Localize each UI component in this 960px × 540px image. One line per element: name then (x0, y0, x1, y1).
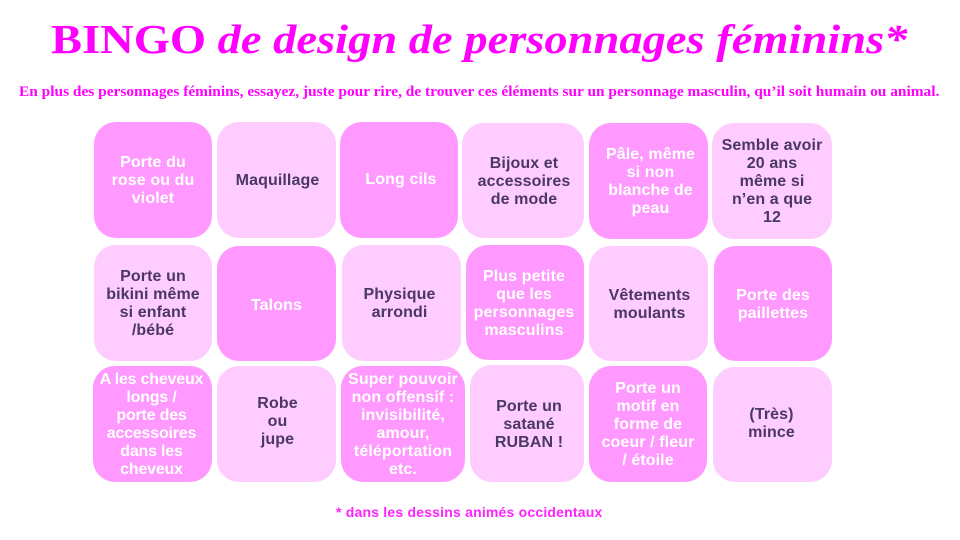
card: cheveux longs: porte des (116, 407, 187, 424)
card: plus petite: personnages (474, 304, 574, 320)
card: semble avoir 20 ans: même si (740, 173, 804, 190)
card: ruban: satané (503, 416, 555, 432)
card: talons: Talons (251, 296, 302, 314)
card: vetements moulants: moulants (614, 304, 685, 322)
card: pale: peau (632, 200, 669, 217)
card: ruban (470, 365, 584, 482)
card: bijoux: accessoires (478, 172, 570, 190)
card: motif: motif en (616, 398, 680, 415)
card: semble avoir 20 ans: Semble avoir (722, 137, 822, 154)
card: bijoux (462, 123, 584, 238)
card: bikini (94, 245, 212, 361)
card: motif: Porte un (615, 380, 681, 397)
card: rose ou violet: rose ou du (112, 172, 194, 189)
card: plus petite: Plus petite (483, 268, 565, 284)
card: bijoux: de mode (491, 190, 557, 208)
card: robe ou jupe: ou (268, 413, 287, 430)
card: bikini: si enfant (120, 304, 186, 321)
card: plus petite: masculins (484, 322, 564, 338)
card: plus petite (466, 245, 584, 360)
card: paillettes: paillettes (738, 304, 808, 322)
card: rose ou violet: Porte du (120, 154, 186, 171)
card: physique arrondi (342, 245, 461, 361)
card: long cils (340, 122, 458, 238)
card: motif: forme de (614, 416, 682, 433)
card: long cils: Long cils (365, 171, 437, 188)
card: ruban: Porte un (496, 398, 562, 414)
card: cheveux longs: longs / (126, 389, 177, 406)
card: vetements moulants (589, 246, 708, 361)
card: cheveux longs (93, 366, 212, 482)
card: mince (713, 367, 832, 482)
card: pale: si non (627, 164, 674, 181)
card: super pouvoir: téléportation (354, 443, 452, 460)
card: maquillage (217, 122, 336, 238)
card: semble avoir 20 ans (712, 123, 832, 239)
card: bikini: /bébé (132, 322, 174, 339)
card: cheveux longs: dans les (120, 443, 183, 460)
card: rose ou violet (94, 122, 212, 238)
card: cheveux longs: A les cheveux (100, 371, 203, 388)
card: robe ou jupe: jupe (261, 431, 294, 448)
card: talons (217, 246, 336, 361)
card: pale: Pâle, même (606, 146, 695, 163)
card: cheveux longs: cheveux (120, 461, 183, 478)
card: paillettes (714, 246, 832, 361)
card: physique arrondi: Physique (364, 286, 435, 303)
card: mince: mince (748, 424, 795, 440)
card: bijoux: Bijoux et (490, 154, 558, 172)
card: semble avoir 20 ans: 20 ans (747, 155, 797, 172)
footnote: * dans les dessins animés occidentaux (336, 504, 603, 520)
card: motif: / étoile (622, 452, 674, 469)
card: mince: (Très) (749, 406, 794, 422)
card: pale: blanche de (608, 182, 693, 199)
card: motif (589, 366, 707, 482)
card: super pouvoir: Super pouvoir (348, 371, 458, 388)
card: maquillage: Maquillage (236, 172, 319, 189)
card: super pouvoir (341, 366, 465, 482)
bingo grid (93, 122, 832, 482)
card: robe ou jupe: Robe (257, 395, 298, 412)
card: paillettes: Porte des (736, 286, 810, 304)
card: rose ou violet: violet (132, 190, 174, 207)
card: semble avoir 20 ans: n’en a que (732, 191, 812, 208)
card: vetements moulants: Vêtements (609, 286, 690, 304)
card: pale (589, 123, 708, 239)
card: super pouvoir: amour, (376, 425, 430, 442)
card: ruban: RUBAN ! (495, 434, 563, 450)
card: bikini: bikini même (106, 286, 200, 303)
card: super pouvoir: invisibilité, (361, 407, 445, 424)
title: BINGO de design de personnages féminins* (51, 18, 907, 63)
card: super pouvoir: etc. (389, 461, 417, 478)
card: physique arrondi: arrondi (372, 304, 427, 321)
card: robe ou jupe (217, 366, 336, 482)
card: semble avoir 20 ans: 12 (763, 209, 781, 226)
card: cheveux longs: accessoires (107, 425, 196, 442)
subtitle: En plus des personnages féminins, essayez, juste pour rire, de trouver ces éléments sur un personnage masculin, qu’il soit humain ou animal. (19, 84, 939, 100)
card: motif: coeur / fleur (602, 434, 694, 451)
card: bikini: Porte un (120, 268, 186, 285)
card: plus petite: que les (496, 286, 552, 302)
card: super pouvoir: non offensif : (352, 389, 454, 406)
